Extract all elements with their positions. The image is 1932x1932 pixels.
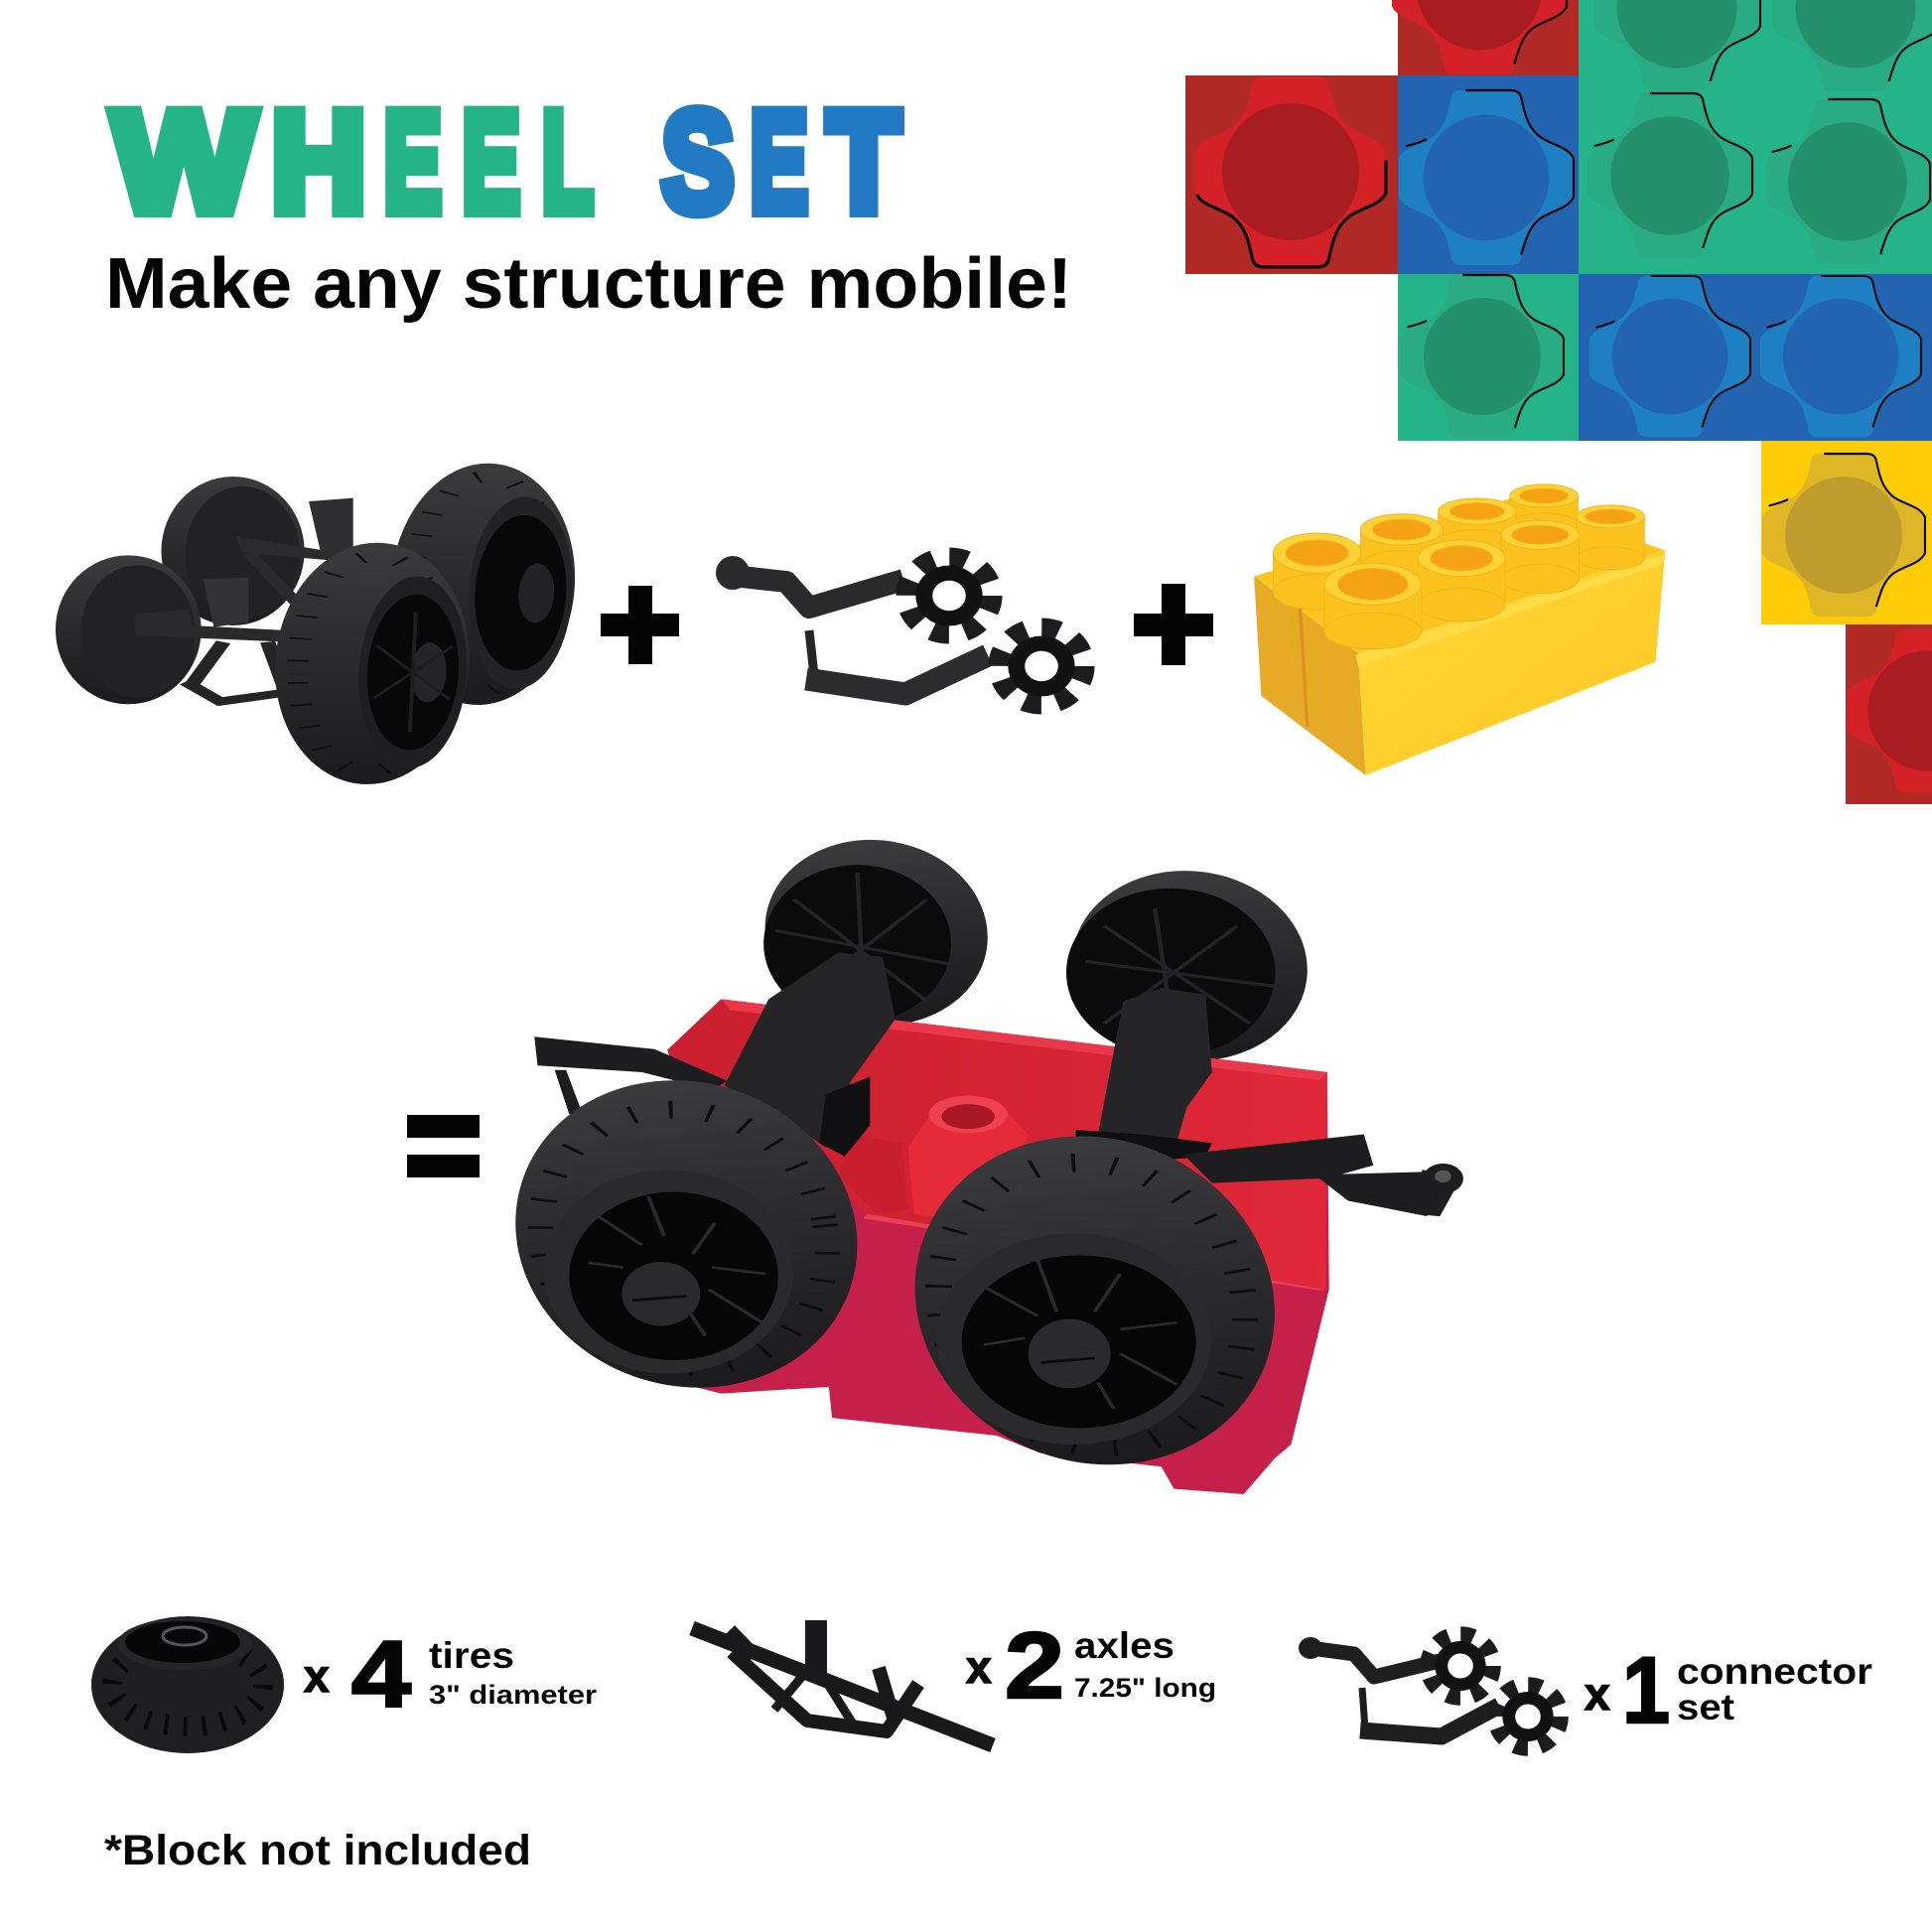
label: connector set: set xyxy=(1677,1687,1734,1727)
footnote: *Block not included xyxy=(104,1827,531,1874)
tile: green large xyxy=(1579,0,1932,274)
label: x 2: 2 xyxy=(1005,1613,1064,1719)
label: x 1: x xyxy=(1585,1668,1610,1720)
title: T xyxy=(828,83,899,241)
label: x 2: x xyxy=(966,1641,992,1693)
title: L xyxy=(542,83,594,241)
title xyxy=(113,83,899,241)
label: axles: 7.25" long xyxy=(1074,1673,1216,1703)
photo: yellow block xyxy=(1254,484,1665,775)
item: connector set xyxy=(1299,1637,1872,1743)
photo: assembled wheel set xyxy=(56,462,581,785)
label: x 1 xyxy=(1585,1638,1670,1743)
icon: plus xyxy=(1134,584,1213,665)
photo: wheel set attached to red block xyxy=(487,830,1463,1494)
photo: connector set xyxy=(716,556,1077,698)
item: tires xyxy=(91,1616,598,1753)
title: E xyxy=(384,83,442,241)
tile: blue lower xyxy=(1579,274,1932,441)
tile: yellow xyxy=(1761,441,1932,624)
title: E xyxy=(463,83,520,241)
icon: tire xyxy=(91,1616,284,1753)
label: axles: axles xyxy=(1074,1625,1174,1666)
label: x 1: 1 xyxy=(1622,1638,1670,1743)
icon: connector xyxy=(1299,1637,1555,1743)
label: x 4: x xyxy=(304,1650,330,1702)
label: x 4: 4 xyxy=(351,1622,411,1727)
icon: equals xyxy=(407,1115,480,1177)
red block xyxy=(667,999,1329,1494)
label: axles xyxy=(1074,1625,1216,1703)
label: x 4 xyxy=(304,1622,411,1727)
icon: axle xyxy=(692,1620,993,1745)
title: E xyxy=(751,83,808,241)
item: axles xyxy=(692,1613,1216,1745)
title: W xyxy=(113,83,254,241)
title: S xyxy=(662,83,734,241)
title: H xyxy=(271,83,366,241)
panel: coloured block pattern xyxy=(1185,0,1932,804)
tile: green lower xyxy=(1398,274,1579,441)
label: connector set: connector xyxy=(1677,1651,1872,1692)
tile: blue top xyxy=(1398,75,1579,274)
front right wheel xyxy=(886,1120,1305,1481)
tile: red left xyxy=(1185,75,1398,274)
rear wheels xyxy=(749,830,1324,1071)
label: tires: 3" diameter xyxy=(429,1680,598,1710)
tile: red top xyxy=(1392,0,1579,75)
axle arms xyxy=(725,952,1212,1161)
label: connector set xyxy=(1677,1651,1872,1727)
subtitle: Make any structure mobile! xyxy=(105,244,1072,324)
label: tires xyxy=(429,1635,598,1710)
connector arms xyxy=(534,1036,1463,1216)
label: tires: tires xyxy=(429,1635,514,1676)
icon: plus xyxy=(601,586,679,664)
front left wheel xyxy=(487,1064,885,1403)
label: x 2 xyxy=(966,1613,1064,1719)
tile: red lower xyxy=(1846,624,1932,804)
